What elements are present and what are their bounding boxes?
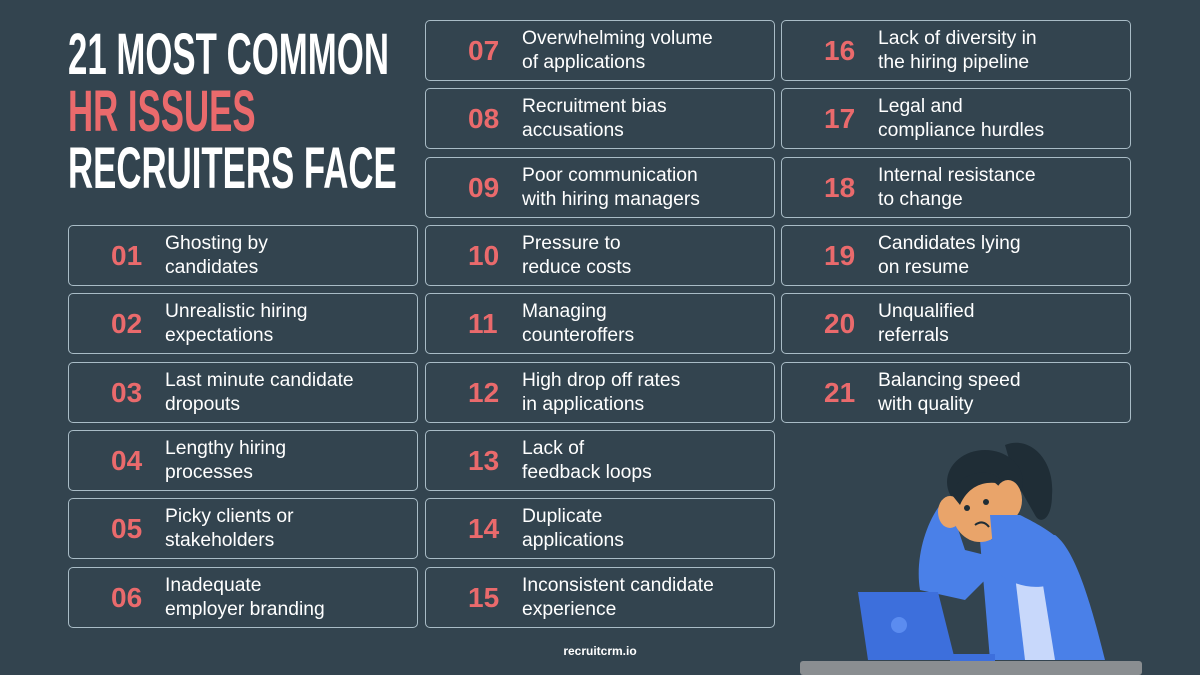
box 11: counteroffers	[522, 325, 634, 346]
box 15: 15	[468, 582, 499, 613]
box 03	[68, 362, 418, 423]
box 09: with hiring managers	[522, 189, 700, 210]
box 12	[425, 362, 775, 423]
box 06: Inadequate	[165, 575, 262, 596]
box 07: Overwhelming volume	[522, 28, 713, 49]
box 03: Last minute candidate	[165, 370, 354, 391]
box 10	[425, 225, 775, 286]
box 19: on resume	[878, 257, 969, 278]
box 06: employer branding	[165, 599, 325, 620]
box 21	[781, 362, 1131, 423]
box 11: Managing	[522, 301, 607, 322]
box 10: reduce costs	[522, 257, 631, 278]
box 02	[68, 293, 418, 354]
box 20: 20	[824, 308, 855, 339]
box 14: Duplicate	[522, 506, 602, 527]
box 01: Ghosting by	[165, 233, 268, 254]
box 07: of applications	[522, 52, 645, 73]
box 16	[781, 20, 1131, 81]
box 16: the hiring pipeline	[878, 52, 1029, 73]
title: RECRUITERS FACE	[68, 136, 397, 201]
box 08	[425, 88, 775, 149]
box 05: Picky clients or	[165, 506, 294, 527]
box 17	[781, 88, 1131, 149]
box 01: candidates	[165, 257, 258, 278]
box 17: 17	[824, 103, 855, 134]
box 05: 05	[111, 513, 142, 544]
box 13	[425, 430, 775, 491]
title: 21 MOST COMMON	[68, 22, 389, 87]
box 17: Legal and	[878, 96, 963, 117]
box 19: Candidates lying	[878, 233, 1021, 254]
box 15: Inconsistent candidate	[522, 575, 714, 596]
box 10: 10	[468, 240, 499, 271]
box 05	[68, 498, 418, 559]
illustration: stressed recruiter at laptop	[800, 442, 1142, 675]
title	[68, 22, 397, 201]
box 17: compliance hurdles	[878, 120, 1044, 141]
box 06: 06	[111, 582, 142, 613]
box 14	[425, 498, 775, 559]
box 12: in applications	[522, 394, 644, 415]
box 11: 11	[468, 308, 498, 339]
box 18	[781, 157, 1131, 218]
box 09: Poor communication	[522, 165, 698, 186]
box 09	[425, 157, 775, 218]
box 21: with quality	[878, 394, 973, 415]
box 02: expectations	[165, 325, 273, 346]
box 03: 03	[111, 377, 142, 408]
box 15: experience	[522, 599, 616, 620]
box 04: 04	[111, 445, 142, 476]
box 07	[425, 20, 775, 81]
box 11	[425, 293, 775, 354]
box 06	[68, 567, 418, 628]
box 19	[781, 225, 1131, 286]
box 02: Unrealistic hiring	[165, 301, 308, 322]
box 08: Recruitment bias	[522, 96, 667, 117]
box 20: Unqualified	[878, 301, 974, 322]
box 10: Pressure to	[522, 233, 621, 254]
box 14: applications	[522, 530, 624, 551]
box 12: High drop off rates	[522, 370, 680, 391]
box 18: 18	[824, 172, 855, 203]
box 08: 08	[468, 103, 499, 134]
box 04: Lengthy hiring	[165, 438, 286, 459]
box 13: Lack of	[522, 438, 584, 459]
box 04: processes	[165, 462, 253, 483]
box 13: feedback loops	[522, 462, 652, 483]
box 16: 16	[824, 35, 855, 66]
box 07: 07	[468, 35, 499, 66]
box 12: 12	[468, 377, 499, 408]
box 20	[781, 293, 1131, 354]
box 18: to change	[878, 189, 963, 210]
box 20: referrals	[878, 325, 949, 346]
box 14: 14	[468, 513, 499, 544]
box 05: stakeholders	[165, 530, 274, 551]
box 13: 13	[468, 445, 499, 476]
box 21: Balancing speed	[878, 370, 1021, 391]
box 19: 19	[824, 240, 855, 271]
footer: recruitcrm.io	[563, 644, 637, 658]
box 21: 21	[824, 377, 855, 408]
box 09: 09	[468, 172, 499, 203]
box 03: dropouts	[165, 394, 240, 415]
box 18: Internal resistance	[878, 165, 1036, 186]
box 16: Lack of diversity in	[878, 28, 1037, 49]
box 15	[425, 567, 775, 628]
box 02: 02	[111, 308, 142, 339]
title: HR ISSUES	[68, 79, 256, 144]
box 04	[68, 430, 418, 491]
box 08: accusations	[522, 120, 624, 141]
box 01: 01	[111, 240, 142, 271]
box 01	[68, 225, 418, 286]
